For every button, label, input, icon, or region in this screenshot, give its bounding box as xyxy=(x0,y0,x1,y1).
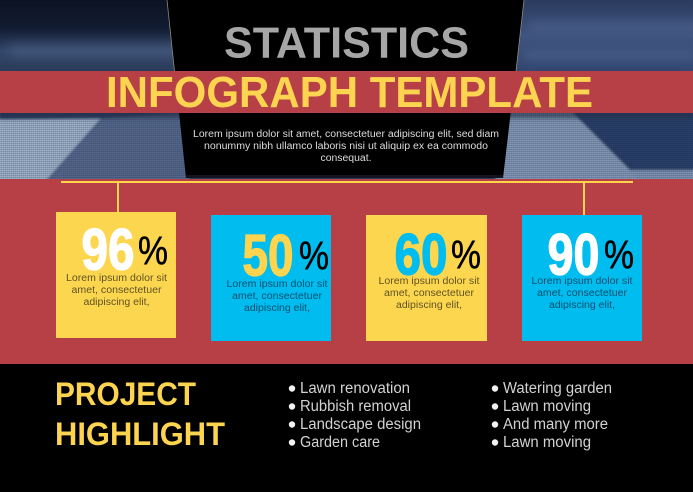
stat card: 96% xyxy=(56,212,176,338)
heading: project highlight: HIGHLIGHT xyxy=(55,416,225,452)
red title band xyxy=(0,68,693,117)
value: 96: 96 xyxy=(82,218,134,282)
heading: project highlight: PROJECT xyxy=(55,376,196,412)
footer panel xyxy=(0,364,693,492)
percent sign: % xyxy=(604,234,634,278)
description: amet, consectetuer xyxy=(232,291,323,302)
stat card: 60% xyxy=(366,215,487,341)
list: services column two xyxy=(492,380,612,451)
intro paragraph: nonummy nibh ullamco laboris nisi ut aliquip ex ea commodo xyxy=(204,141,488,152)
percent sign: % xyxy=(451,234,481,278)
description: adipiscing elit, xyxy=(549,300,615,311)
value: 60: 60 xyxy=(394,222,448,288)
red section background xyxy=(0,179,693,364)
intro paragraph xyxy=(193,129,499,164)
list: services column one xyxy=(289,380,421,451)
list: services column one: Garden care xyxy=(300,434,380,451)
list: services column one: Rubbish removal xyxy=(300,398,411,415)
list: services column two: Lawn moving xyxy=(503,434,591,451)
description xyxy=(66,273,167,308)
percent sign: % xyxy=(138,230,168,274)
description: Lorem ipsum dolor sit xyxy=(66,273,167,284)
description xyxy=(378,276,480,311)
description: Lorem ipsum dolor sit xyxy=(378,276,480,287)
title: statistics: STATISTICS xyxy=(224,18,469,68)
description: Lorem ipsum dolor sit xyxy=(532,276,633,287)
list: services column two: And many more xyxy=(503,416,608,433)
intro paragraph: consequat. xyxy=(320,153,372,164)
list: services column one: Landscape design xyxy=(300,416,421,433)
description xyxy=(532,276,633,311)
title: infograph template: INFOGRAPH TEMPLATE xyxy=(106,68,593,117)
description xyxy=(226,279,328,314)
laptop screen xyxy=(167,0,524,178)
percent sign: % xyxy=(299,234,329,278)
value: 90: 90 xyxy=(548,222,600,288)
value: 50: 50 xyxy=(242,224,294,288)
description: adipiscing elit, xyxy=(396,300,462,311)
description: amet, consectetuer xyxy=(537,288,628,299)
list: services column two: Watering garden xyxy=(503,380,612,397)
heading: project highlight xyxy=(55,376,225,452)
list: services column one: Lawn renovation xyxy=(300,380,410,397)
stat card: 90% xyxy=(522,215,642,341)
intro paragraph: Lorem ipsum dolor sit amet, consectetuer adipiscing elit, sed diam xyxy=(193,129,499,140)
description: adipiscing elit, xyxy=(244,303,310,314)
list: services column two: Lawn moving xyxy=(503,398,591,415)
connector lines xyxy=(61,181,633,215)
description: amet, consectetuer xyxy=(384,288,475,299)
description: amet, consectetuer xyxy=(72,285,162,296)
description: Lorem ipsum dolor sit xyxy=(226,279,328,290)
description: adipiscing elit, xyxy=(84,297,150,308)
background photo: laptop on mesh surface xyxy=(0,0,693,185)
stat card: 50% xyxy=(211,215,331,341)
